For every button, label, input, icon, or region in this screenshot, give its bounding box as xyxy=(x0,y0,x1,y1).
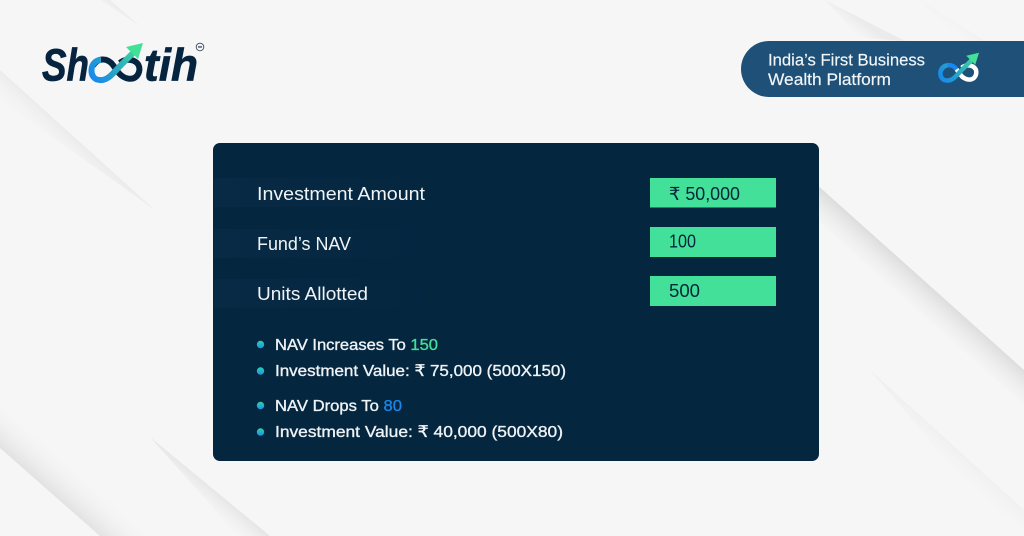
logo: Shootih xyxy=(42,40,204,90)
bullet: NAV drops: NAV Drops To 80 xyxy=(275,398,402,415)
bullet: investment value 40,000: Investment Value: ₹ 40,000 (500X80) xyxy=(275,424,563,441)
row: fund's NAV xyxy=(214,227,776,258)
label: units allotted: Units Allotted xyxy=(257,284,368,304)
icon: infinity arrow xyxy=(940,53,979,81)
value box: 500 xyxy=(650,276,776,306)
label: investment amount: Investment Amount xyxy=(257,184,425,204)
logo wordmark end: tih xyxy=(144,40,198,90)
bullet: NAV increases: NAV Increases To 150 xyxy=(275,337,438,354)
tagline text line 1: India’s First Business xyxy=(768,52,925,70)
value: 100: 100 xyxy=(669,232,696,252)
value: 50,000: ₹ 50,000 xyxy=(669,184,740,204)
main panel xyxy=(213,143,819,461)
value box: 100 xyxy=(650,227,776,257)
row: units allotted xyxy=(214,276,776,308)
value box: 50,000 xyxy=(650,178,776,208)
logo arrow head xyxy=(126,43,143,59)
label: fund's NAV: Fund’s NAV xyxy=(257,234,351,254)
bullet: investment value 75,000: Investment Value: ₹ 75,000 (500X150) xyxy=(275,363,566,380)
logo infinity dark loop xyxy=(93,59,139,79)
logo wordmark start: Sh xyxy=(42,40,89,90)
tagline pill xyxy=(741,41,1024,97)
row: investment amount xyxy=(214,178,776,208)
value: 500: 500 xyxy=(669,281,700,301)
bullet list xyxy=(257,337,566,441)
trademark mark xyxy=(196,43,204,51)
tagline text line 2: Wealth Platform xyxy=(768,71,891,89)
logo infinity swoosh xyxy=(91,53,133,80)
